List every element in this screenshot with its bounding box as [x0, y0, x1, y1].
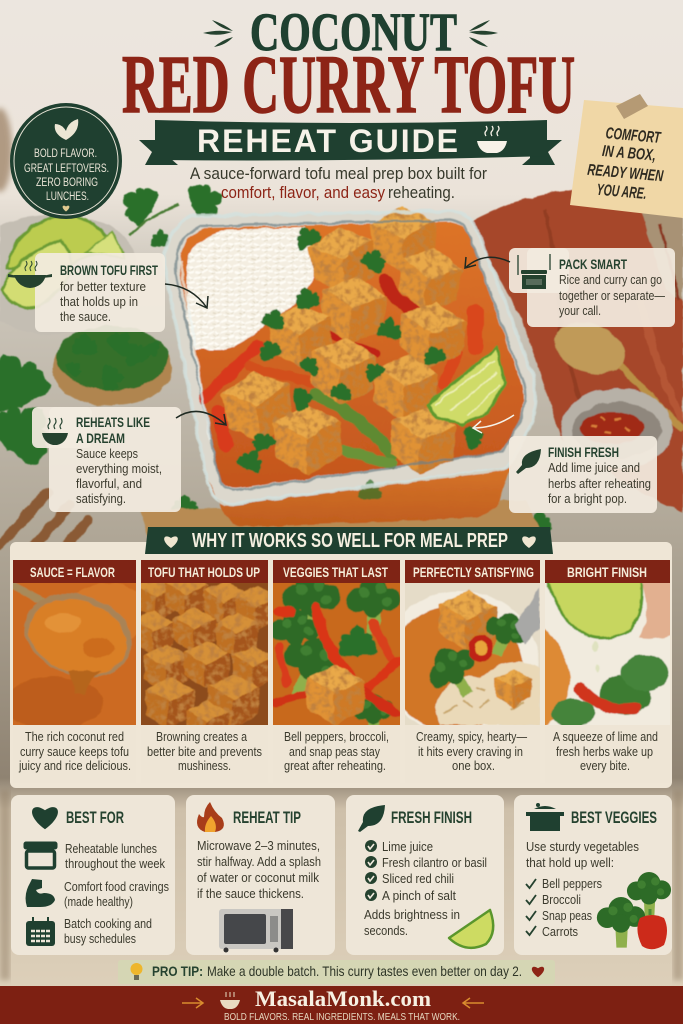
photo: vegetables	[273, 583, 400, 725]
callout: reheats like a dream: satisfying.	[76, 491, 126, 506]
callout: pack smart	[509, 248, 675, 327]
badge: bold flavor: BOLD FLAVOR.	[34, 148, 97, 160]
sticky note	[570, 94, 683, 218]
card: best veggies: Broccoli	[542, 892, 581, 907]
card: best veggies	[514, 795, 672, 955]
icon: pot	[526, 803, 564, 831]
badge: bold flavor: LUNCHES.	[46, 191, 89, 203]
card: best for: Reheatable lunches	[65, 841, 157, 856]
icon: leaf	[516, 449, 541, 474]
glass rim	[165, 211, 536, 503]
footer	[0, 986, 683, 1024]
callout: pack smart: your call.	[559, 303, 601, 318]
cinnamon sticks	[0, 492, 88, 560]
column: bright finish	[539, 560, 676, 783]
column: tofu that holds up: better bite and prevents	[147, 744, 262, 759]
arrow: to lime	[473, 415, 514, 433]
decorative leaf strokes left	[203, 20, 233, 47]
cilantro sprigs	[0, 177, 553, 533]
icon: bowl	[220, 992, 240, 1009]
card: fresh finish: Fresh cilantro or basil	[382, 855, 487, 870]
column: sauce = flavor: SAUCE = FLAVOR	[30, 564, 115, 580]
icon: broccoli and pepper	[597, 872, 671, 949]
pro tip bar: PRO TIP:	[152, 963, 203, 979]
badge: bold flavor	[10, 103, 122, 219]
card: best veggies: that hold up well:	[526, 855, 614, 870]
callout: brown tofu first	[8, 253, 165, 332]
pro tip bar	[118, 960, 555, 984]
tofu cubes	[221, 205, 466, 475]
badge: bold flavor: GREAT LEFTOVERS.	[24, 163, 109, 175]
callout: finish fresh: for a bright pop.	[548, 491, 627, 506]
photo: browned tofu	[141, 583, 268, 725]
icon: wok	[8, 261, 52, 288]
card: fresh finish: seconds.	[364, 923, 408, 938]
card: best veggies: Use sturdy vegetables	[526, 839, 639, 854]
icon: flame	[197, 802, 224, 832]
column: perfectly satisfying: it hits every craving in	[418, 744, 523, 759]
card: best for	[11, 795, 175, 955]
photo: lime squeeze	[545, 583, 670, 725]
callout: finish fresh: Add lime juice and	[548, 460, 640, 475]
reheat guide ribbon: REHEAT GUIDE	[197, 123, 458, 159]
card: reheat tip: REHEAT TIP	[233, 808, 301, 827]
card: fresh finish: Lime juice	[382, 839, 433, 854]
chili flake bowl	[561, 388, 673, 468]
reheat guide ribbon	[139, 120, 562, 165]
card: reheat tip: if the sauce thickens.	[197, 886, 304, 901]
callout: reheats like a dream	[32, 407, 181, 512]
column: tofu that holds up: Browning creates a	[156, 729, 248, 744]
gold spoon	[548, 313, 683, 430]
column: sauce = flavor: juicy and rice delicious.	[18, 758, 131, 773]
herb bowl	[52, 325, 172, 406]
card: fresh finish: Adds brightness in	[364, 907, 460, 922]
icon: flexed arm	[26, 879, 55, 907]
lime bowl	[0, 215, 136, 335]
card: fresh finish: A pinch of salt	[382, 888, 456, 903]
column: veggies that last: Bell peppers, broccoli,	[284, 729, 389, 744]
icon: container	[518, 254, 550, 289]
footer: MasalaMonk.com	[255, 986, 431, 1011]
rice	[187, 227, 315, 350]
icon: steaming bowl	[477, 126, 507, 153]
card: best for: throughout the week	[65, 856, 165, 871]
column: bright finish: every bite.	[580, 758, 630, 773]
icon: meal box	[24, 842, 57, 868]
pro tip bar: Make a double batch. This curry tastes even better on day 2.	[207, 963, 522, 979]
card: best for: Comfort food cravings	[64, 879, 169, 894]
column: bright finish: BRIGHT FINISH	[567, 564, 647, 580]
photo: sauce spoon	[13, 583, 136, 725]
column: sauce = flavor: The rich coconut red	[25, 729, 124, 744]
card: reheat tip	[186, 795, 335, 955]
glass body	[165, 211, 536, 503]
card: best for: busy schedules	[64, 931, 136, 946]
callout: reheats like a dream: REHEATS LIKE	[76, 414, 150, 430]
callout: reheats like a dream: flavorful, and	[76, 476, 142, 491]
column: perfectly satisfying	[382, 560, 546, 783]
peppers and peas	[205, 280, 475, 464]
section heading ribbon	[145, 527, 553, 554]
column: bright finish: A squeeze of lime and	[553, 729, 658, 744]
callout: pack smart: Rice and curry can go	[559, 272, 662, 287]
wooden board	[140, 500, 545, 540]
left arrow	[182, 998, 203, 1008]
cilantro garnish	[235, 221, 488, 500]
arrow: to rice	[165, 284, 208, 308]
front wall with sauce	[208, 460, 513, 527]
subtitle: comfort, flavor, and easy	[221, 183, 385, 202]
card: best for: (made healthy)	[64, 894, 133, 909]
callout: finish fresh: FINISH FRESH	[548, 444, 619, 460]
column: sauce = flavor	[3, 560, 148, 783]
callout: brown tofu first: that holds up in	[60, 294, 138, 309]
icon: leaf	[55, 119, 78, 140]
badge: bold flavor: ZERO BORING	[36, 177, 98, 189]
callout: reheats like a dream: Sauce keeps	[76, 446, 138, 461]
subtitle	[190, 164, 487, 202]
card: fresh finish	[346, 795, 504, 955]
column: tofu that holds up: TOFU THAT HOLDS UP	[148, 564, 260, 580]
column: veggies that last: VEGGIES THAT LAST	[283, 564, 388, 580]
icon: steaming bowl	[42, 418, 68, 445]
arrow: to peppers	[176, 411, 226, 425]
card: best for: Batch cooking and	[64, 916, 152, 931]
column: veggies that last	[267, 560, 406, 783]
tape	[616, 94, 648, 119]
card: best veggies: Bell peppers	[542, 876, 602, 891]
callout: reheats like a dream: A DREAM	[76, 430, 125, 446]
sticky note: YOU ARE.	[596, 182, 647, 203]
title line: coconut: COCONUT	[250, 2, 457, 62]
title	[122, 2, 575, 130]
column: tofu that holds up	[133, 560, 277, 783]
subtitle: A sauce-forward tofu meal prep box built for	[190, 164, 487, 183]
card: fresh finish: FRESH FINISH	[391, 808, 472, 827]
panel: why it works	[3, 527, 676, 788]
footer: BOLD FLAVORS. REAL INGREDIENTS. MEALS THAT WORK.	[224, 1012, 460, 1023]
icon: light bulb	[130, 963, 142, 980]
callout: reheats like a dream: everything moist,	[76, 461, 162, 476]
column: sauce = flavor: curry sauce keeps tofu	[20, 744, 129, 759]
column: bright finish: fresh herbs wake up	[556, 744, 653, 759]
icon: leaf	[358, 805, 385, 832]
subtitle: reheating.	[388, 183, 455, 202]
card: reheat tip: Microwave 2–3 minutes,	[197, 838, 320, 853]
card: reheat tip: of water or coconut milk	[197, 870, 319, 885]
callout: finish fresh	[509, 436, 657, 513]
lime wedge	[427, 348, 505, 425]
decorative leaf strokes right	[469, 20, 498, 47]
column: veggies that last: and snap peas stay	[289, 744, 380, 759]
icon: lime wedge	[449, 910, 493, 948]
icon: heart	[32, 807, 58, 829]
callout: brown tofu first: for better texture	[60, 279, 146, 294]
hero food scene	[0, 177, 683, 560]
napkin	[470, 190, 683, 512]
card: best veggies: Carrots	[542, 924, 578, 939]
card: fresh finish: Sliced red chili	[382, 871, 454, 886]
section heading ribbon: WHY IT WORKS SO WELL FOR MEAL PREP	[192, 530, 508, 552]
column: perfectly satisfying: one box.	[452, 758, 495, 773]
icon: microwave	[219, 909, 293, 952]
callout: brown tofu first: the sauce.	[60, 309, 111, 324]
glass meal prep container	[165, 205, 536, 527]
column: perfectly satisfying: Creamy, spicy, hearty—	[416, 729, 527, 744]
callout: brown tofu first: BROWN TOFU FIRST	[60, 262, 158, 278]
sticky note: IN A BOX,	[601, 143, 657, 165]
card: best veggies: Snap peas	[542, 908, 592, 923]
card: best for: BEST FOR	[66, 808, 124, 827]
card: reheat tip: stir halfway. Add a splash	[197, 854, 321, 869]
icon: calendar	[26, 917, 55, 946]
right arrow	[463, 998, 484, 1008]
callout: pack smart: PACK SMART	[559, 256, 627, 272]
column: perfectly satisfying: PERFECTLY SATISFYING	[413, 564, 534, 580]
column: tofu that holds up: mushiness.	[178, 758, 231, 773]
column: veggies that last: great after reheating.	[284, 758, 386, 773]
arrow: to container	[465, 257, 510, 268]
callout: finish fresh: herbs after reheating	[548, 476, 651, 491]
icon: heart	[532, 967, 544, 977]
sauce base	[180, 222, 523, 488]
photo: plate with fork	[405, 583, 540, 725]
